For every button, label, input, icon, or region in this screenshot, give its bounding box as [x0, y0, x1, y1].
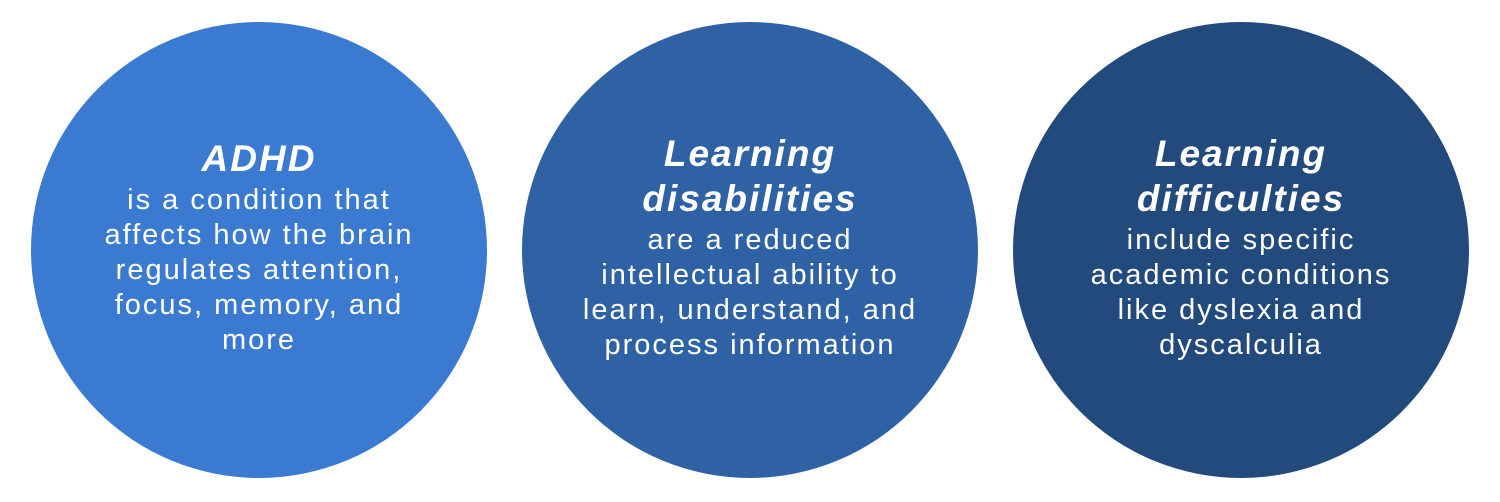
- text: difficulties description: [1091, 224, 1391, 361]
- panel: ADHD: [31, 22, 487, 478]
- heading: Learning difficulties: [1137, 133, 1345, 219]
- panel: Learning difficulties: [1013, 22, 1469, 478]
- text: difficulties description: academic conditions: [1091, 259, 1391, 291]
- text: disabilities description: process information: [604, 329, 896, 361]
- text: difficulties description: like dyslexia and: [1118, 294, 1364, 326]
- text: ADHD description: regulates attention,: [116, 254, 402, 286]
- text: difficulties description: include specific: [1127, 224, 1355, 256]
- text: disabilities description: learn, understand, and: [583, 294, 917, 326]
- text: ADHD description: more: [222, 324, 296, 356]
- text: difficulties description: dyscalculia: [1159, 329, 1323, 361]
- panel: Learning disabilities: [522, 22, 978, 478]
- heading: Learning difficulties: Learning: [1155, 133, 1327, 174]
- text: ADHD description: [104, 184, 414, 356]
- heading: Learning disabilities: Learning: [664, 133, 836, 174]
- text: disabilities description: are a reduced: [648, 224, 852, 256]
- text: disabilities description: intellectual ability to: [601, 259, 899, 291]
- heading: Learning difficulties: difficulties: [1137, 178, 1345, 219]
- heading: Learning disabilities: disabilities: [642, 178, 858, 219]
- text: disabilities description: [583, 224, 917, 361]
- text: ADHD description: focus, memory, and: [115, 289, 403, 321]
- heading: ADHD: ADHD: [202, 138, 316, 179]
- text: ADHD description: is a condition that: [127, 184, 391, 216]
- text: ADHD description: affects how the brain: [104, 219, 414, 251]
- heading: Learning disabilities: [642, 133, 858, 219]
